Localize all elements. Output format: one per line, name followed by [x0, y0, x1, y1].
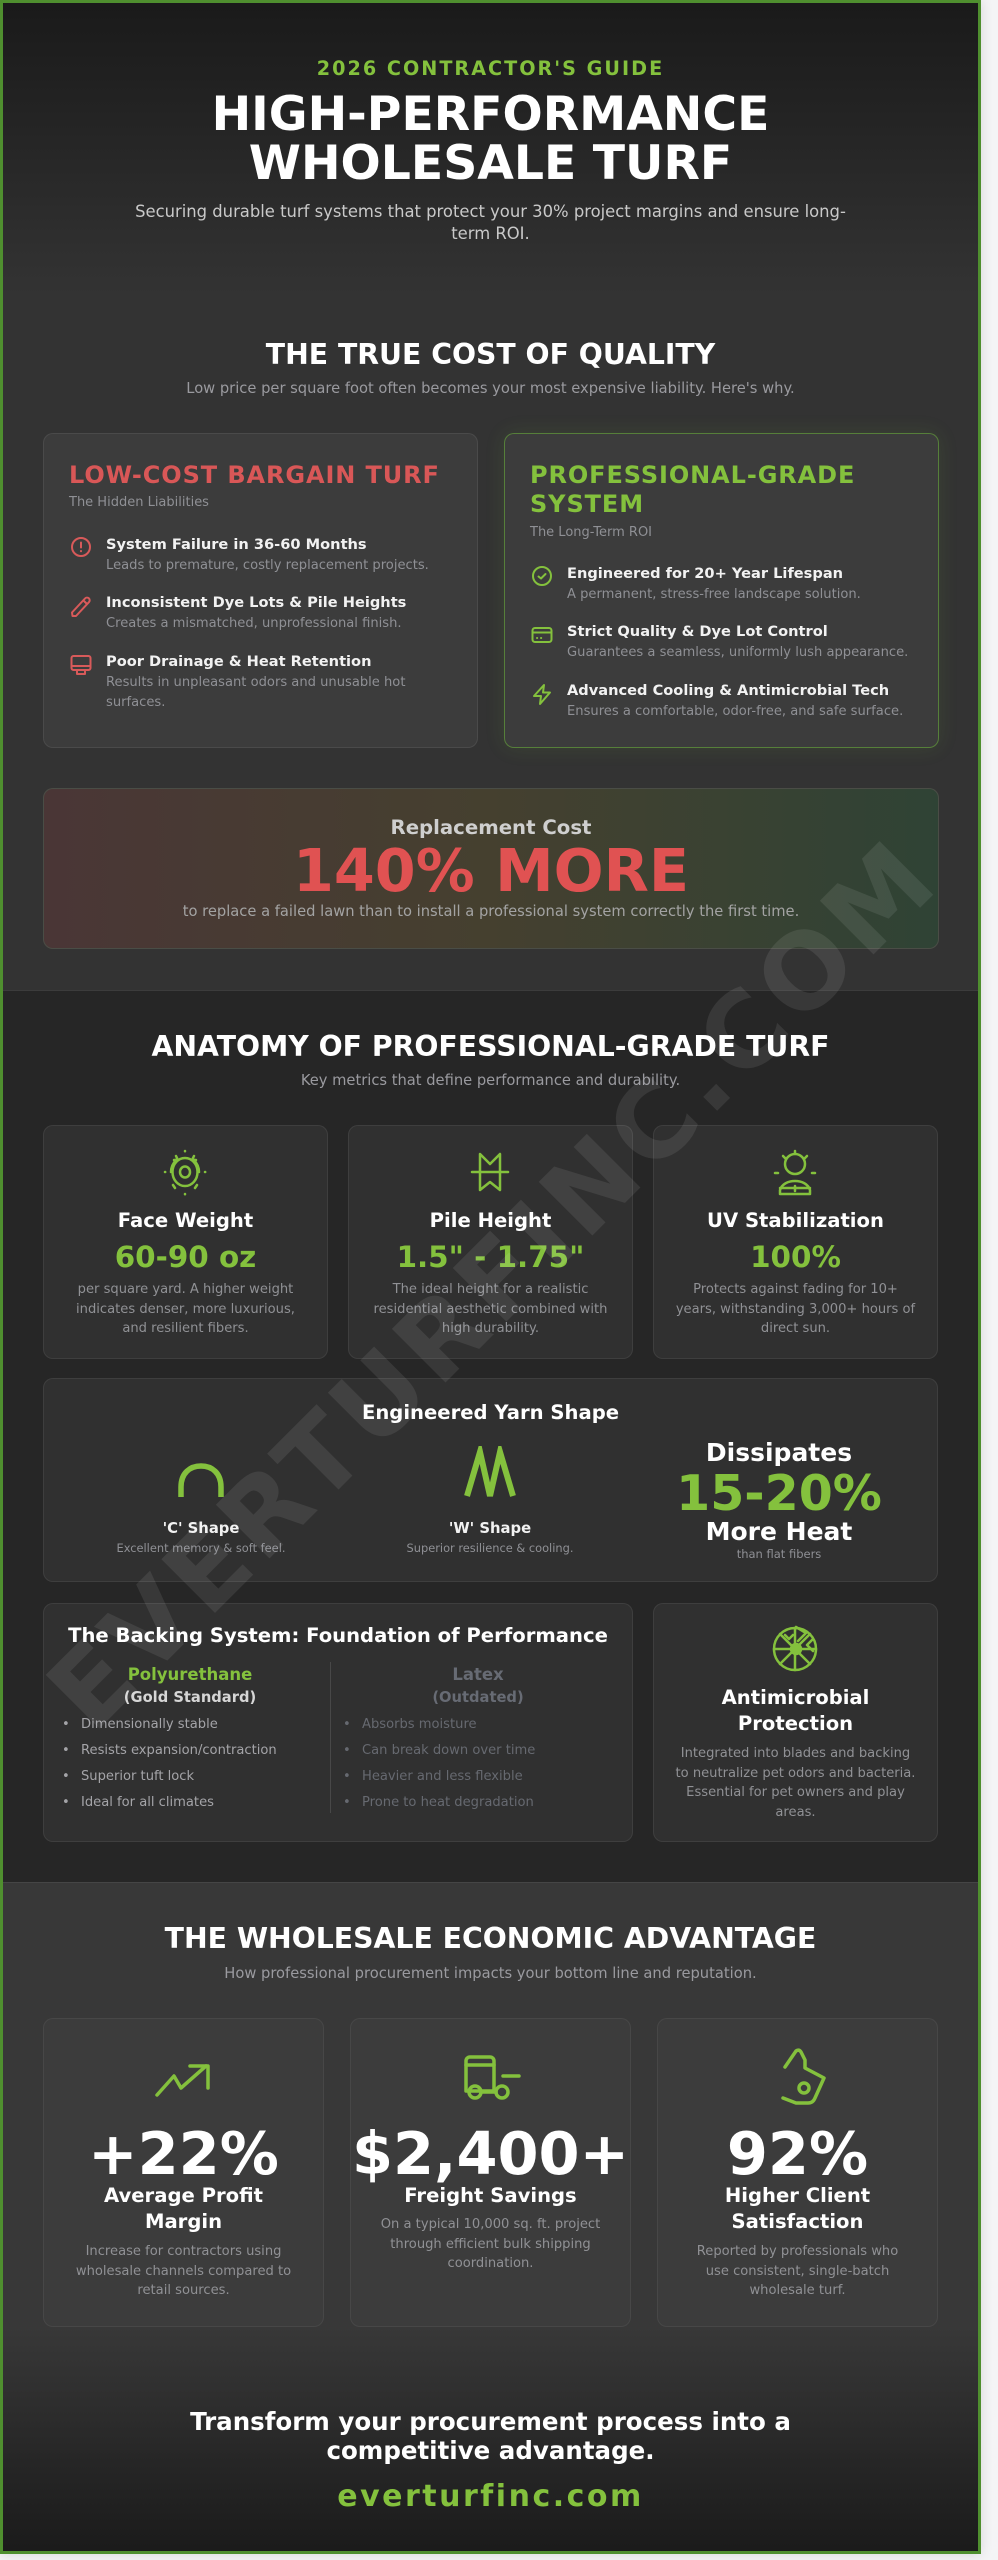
- polyurethane bullets: •: [62, 1769, 70, 1784]
- stat text: Reported by professionals who: [697, 2244, 898, 2259]
- main title: WHOLESALE TURF: [249, 136, 732, 191]
- card title: UV Stabilization: [707, 1209, 884, 1232]
- liability: inconsistent dye lots: [106, 594, 406, 631]
- liability: inconsistent dye lots: Inconsistent Dye Lots & Pile Heights: [106, 594, 406, 611]
- benefit: cooling: Ensures a comfortable, odor-free, and safe surface.: [567, 704, 903, 719]
- stat line: More Heat: [706, 1517, 852, 1546]
- stat value: 92%: [727, 2119, 868, 2188]
- polyurethane list: Superior tuft lock: [81, 1769, 194, 1784]
- call to action: competitive advantage.: [326, 2436, 655, 2465]
- icon: C shape: [178, 1463, 224, 1497]
- card text: [76, 1282, 295, 1336]
- section heading: THE WHOLESALE ECONOMIC ADVANTAGE: [165, 1922, 816, 1955]
- stat text: through efficient bulk shipping: [390, 2237, 591, 2252]
- stat text: wholesale channels compared to: [76, 2264, 291, 2279]
- stat label: Satisfaction: [732, 2210, 863, 2233]
- polyurethane list: Ideal for all climates: [81, 1795, 214, 1810]
- stat label: Higher Client: [725, 2184, 870, 2207]
- card text: Integrated into blades and backing: [681, 1746, 910, 1761]
- stat label: [104, 2184, 263, 2233]
- latex bullets: [343, 1717, 351, 1810]
- panel title: Engineered Yarn Shape: [362, 1401, 619, 1424]
- stat text: On a typical 10,000 sq. ft. project: [381, 2217, 600, 2232]
- stat text: wholesale turf.: [749, 2283, 846, 2298]
- panel: professional-grade system: [504, 433, 939, 748]
- liability: poor drainage: Poor Drainage & Heat Retention: [106, 653, 371, 670]
- latex list: Heavier and less flexible: [362, 1769, 523, 1784]
- card: client satisfaction: [657, 2018, 938, 2327]
- card text: direct sun.: [761, 1321, 830, 1336]
- stat text: [381, 2217, 600, 2271]
- card value: 60-90 oz: [115, 1240, 256, 1274]
- icon: pile height: [470, 1152, 510, 1192]
- icon: alert circle: [71, 537, 91, 557]
- icon: sun: [774, 1150, 816, 1196]
- icon: truck: [464, 2055, 521, 2100]
- benefit: lifespan: A permanent, stress-free landscape solution.: [567, 587, 861, 602]
- low-cost subtitle: The Hidden Liabilities: [69, 495, 209, 510]
- icon: hand: [781, 2048, 826, 2105]
- banner text: to replace a failed lawn than to install a professional system correctly the first time.: [183, 903, 799, 920]
- professional title: PROFESSIONAL-GRADE: [530, 461, 855, 489]
- card title: [722, 1686, 869, 1735]
- professional title: SYSTEM: [530, 490, 644, 518]
- card title: Antimicrobial: [722, 1686, 869, 1709]
- stat label: Freight Savings: [404, 2184, 577, 2207]
- call to action: [3, 2407, 978, 2465]
- C shape label: 'C' Shape: [163, 1520, 239, 1537]
- polyurethane heading: (Gold Standard): [124, 1689, 256, 1706]
- call to action: Transform your procurement process into a: [190, 2407, 791, 2436]
- card title: Protection: [738, 1712, 853, 1735]
- benefit: cooling: [567, 682, 903, 719]
- card text: to neutralize pet odors and bacteria.: [676, 1766, 915, 1781]
- polyurethane list: Resists expansion/contraction: [81, 1743, 277, 1758]
- stat text: Increase for contractors using: [86, 2244, 281, 2259]
- section: economic advantage: [3, 1882, 978, 2555]
- stat text: use consistent, single-batch: [706, 2264, 889, 2279]
- benefit: lifespan: [567, 565, 861, 602]
- liability: poor drainage: [106, 653, 406, 710]
- card text: residential aesthetic combined with: [374, 1302, 607, 1317]
- section heading: ANATOMY OF PROFESSIONAL-GRADE TURF: [151, 1030, 830, 1063]
- latex list: Absorbs moisture: [362, 1717, 477, 1732]
- section: anatomy: [3, 990, 978, 1882]
- polyurethane heading: Polyurethane: [128, 1665, 252, 1684]
- header subtitle: term ROI.: [451, 224, 530, 243]
- card text: Essential for pet owners and play: [686, 1785, 905, 1800]
- card text: [374, 1282, 607, 1336]
- panel title: The Backing System: Foundation of Performance: [68, 1624, 608, 1647]
- icon: quality card: [532, 627, 552, 643]
- section: true cost of quality: [3, 295, 978, 990]
- latex bullets: •: [343, 1769, 351, 1784]
- section subheading: How professional procurement impacts your bottom line and reputation.: [224, 1965, 757, 1982]
- liability: inconsistent dye lots: Creates a mismatched, unprofessional finish.: [106, 616, 402, 631]
- section subheading: Key metrics that define performance and durability.: [301, 1072, 680, 1089]
- stat value: 15-20%: [676, 1465, 882, 1522]
- icon: microbe wheel: [772, 1626, 818, 1672]
- card text: per square yard. A higher weight: [78, 1282, 293, 1297]
- benefit: lifespan: Engineered for 20+ Year Lifespan: [567, 565, 843, 582]
- polyurethane bullets: •: [62, 1717, 70, 1732]
- stat note: than flat fibers: [737, 1547, 821, 1561]
- card text: years, withstanding 3,000+ hours of: [676, 1302, 915, 1317]
- liability: system failure: System Failure in 36-60 Months: [106, 536, 367, 553]
- card value: 1.5" - 1.75": [397, 1240, 584, 1274]
- card: pile height: [348, 1125, 633, 1359]
- liability: system failure: Leads to premature, costly replacement projects.: [106, 558, 429, 573]
- eyebrow: 2026 CONTRACTOR'S GUIDE: [317, 57, 664, 80]
- card: face weight: [43, 1125, 328, 1359]
- polyurethane heading: [124, 1665, 256, 1706]
- main title: HIGH-PERFORMANCE: [212, 87, 769, 142]
- liability: poor drainage: Results in unpleasant odors and unusable hot: [106, 675, 405, 690]
- card: antimicrobial: [653, 1603, 938, 1842]
- latex bullets: •: [343, 1795, 351, 1810]
- polyurethane list: [81, 1717, 277, 1810]
- latex bullets: •: [343, 1743, 351, 1758]
- liability: system failure: [106, 536, 429, 573]
- low-cost title: LOW-COST BARGAIN TURF: [69, 461, 440, 489]
- main title: [212, 87, 769, 191]
- benefit: quality control: Guarantees a seamless, uniformly lush appearance.: [567, 645, 908, 660]
- stat line: Dissipates: [706, 1438, 852, 1467]
- card title: Face Weight: [118, 1209, 253, 1232]
- banner value: 140% MORE: [293, 836, 689, 905]
- icon: monitor: [70, 655, 92, 675]
- banner: replacement cost: [43, 788, 939, 949]
- stat text: [657, 2242, 938, 2301]
- latex list: [362, 1717, 535, 1810]
- section heading: THE TRUE COST OF QUALITY: [266, 338, 715, 371]
- professional title: [530, 461, 855, 518]
- stat value: $2,400+: [352, 2119, 629, 2188]
- card text: and resilient fibers.: [122, 1321, 249, 1336]
- polyurethane bullets: •: [62, 1795, 70, 1810]
- banner label: Replacement Cost: [391, 816, 591, 839]
- latex list: Can break down over time: [362, 1743, 535, 1758]
- W shape label: 'W' Shape: [449, 1520, 531, 1537]
- latex heading: (Outdated): [432, 1689, 524, 1706]
- liability: poor drainage: surfaces.: [106, 694, 165, 710]
- card text: Protects against fading for 10+: [693, 1282, 898, 1297]
- card text: [676, 1282, 916, 1336]
- card text: The ideal height for a realistic: [393, 1282, 588, 1297]
- benefit: quality control: Strict Quality & Dye Lot Control: [567, 623, 828, 640]
- benefit: quality control: [567, 623, 908, 660]
- stat label: [725, 2184, 870, 2233]
- watermark: EVERTURFINC.COM: [24, 815, 962, 1753]
- latex list: Prone to heat degradation: [362, 1795, 534, 1810]
- card: uv stabilization: [653, 1125, 938, 1359]
- card text: high durability.: [442, 1321, 539, 1336]
- heat stat: [676, 1438, 882, 1561]
- C shape text: Excellent memory & soft feel.: [116, 1541, 285, 1555]
- stat label: Average Profit: [104, 2184, 263, 2207]
- polyurethane bullets: •: [62, 1743, 70, 1758]
- panel: backing system: [43, 1603, 633, 1842]
- stat label: Margin: [145, 2210, 222, 2233]
- professional subtitle: The Long-Term ROI: [530, 525, 652, 540]
- website: everturfinc.com: [337, 2479, 644, 2514]
- header section: [3, 3, 978, 295]
- card text: indicates denser, more luxurious,: [76, 1302, 295, 1317]
- card value: 100%: [750, 1240, 841, 1274]
- icon: trending up: [155, 2064, 210, 2097]
- icon: W shape: [464, 1446, 516, 1497]
- divider: [330, 1662, 331, 1813]
- header subtitle: [135, 202, 846, 243]
- panel: low-cost bargain turf: [43, 433, 478, 748]
- stat value: +22%: [88, 2119, 279, 2188]
- icon: bolt: [533, 684, 551, 705]
- card text: areas.: [775, 1805, 816, 1820]
- icon: target: [164, 1150, 206, 1196]
- card: freight savings: [350, 2018, 631, 2327]
- stat text: coordination.: [448, 2256, 533, 2271]
- section subheading: Low price per square foot often becomes your most expensive liability. Here's why.: [186, 380, 795, 397]
- polyurethane list: Dimensionally stable: [81, 1717, 218, 1732]
- icon: check circle: [532, 566, 552, 586]
- header subtitle: Securing durable turf systems that protect your 30% project margins and ensure long-: [135, 202, 846, 221]
- card: profit margin: [43, 2018, 324, 2327]
- W shape text: Superior resilience & cooling.: [407, 1541, 573, 1555]
- card text: [676, 1746, 915, 1820]
- panel: yarn shape: [43, 1378, 938, 1582]
- latex bullets: •: [343, 1717, 351, 1732]
- latex heading: Latex: [452, 1665, 504, 1684]
- icon: pencil: [71, 596, 91, 617]
- stat text: retail sources.: [137, 2283, 230, 2298]
- card title: Pile Height: [430, 1209, 551, 1232]
- latex heading: [432, 1665, 524, 1706]
- stat text: [76, 2244, 291, 2298]
- benefit: cooling: Advanced Cooling & Antimicrobial Tech: [567, 682, 889, 699]
- polyurethane bullets: [62, 1717, 70, 1810]
